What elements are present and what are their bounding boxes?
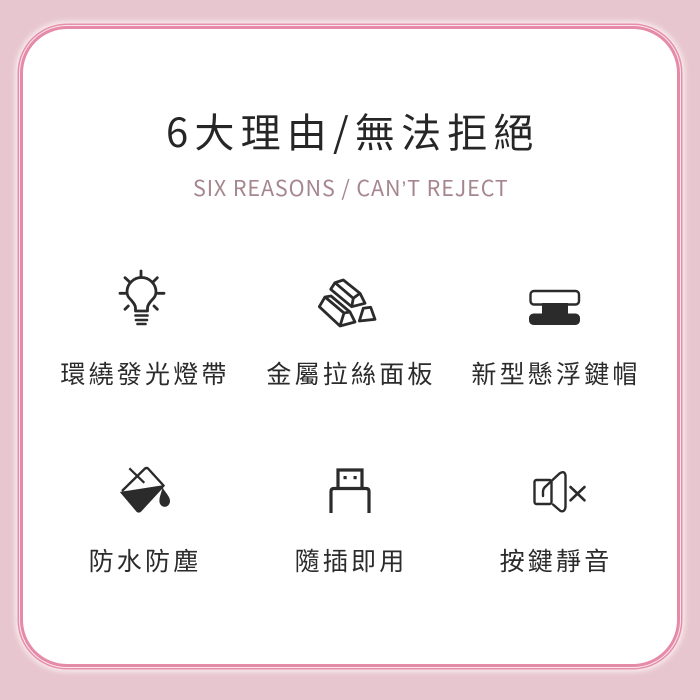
label: 隨插即用: 隨插即用 xyxy=(295,542,407,578)
label: 新型懸浮鍵帽: 新型懸浮鍵帽 xyxy=(471,355,641,391)
subtitle: SIX REASONS / CAN’T REJECT xyxy=(193,172,509,203)
label: 環繞發光燈帶: 環繞發光燈帶 xyxy=(60,355,230,391)
label: 金屬拉絲面板: 金屬拉絲面板 xyxy=(266,355,436,391)
label: 按鍵靜音: 按鍵靜音 xyxy=(500,542,612,578)
title: 6大理由/無法拒絕 xyxy=(166,101,540,159)
label: 防水防塵: 防水防塵 xyxy=(89,542,201,578)
